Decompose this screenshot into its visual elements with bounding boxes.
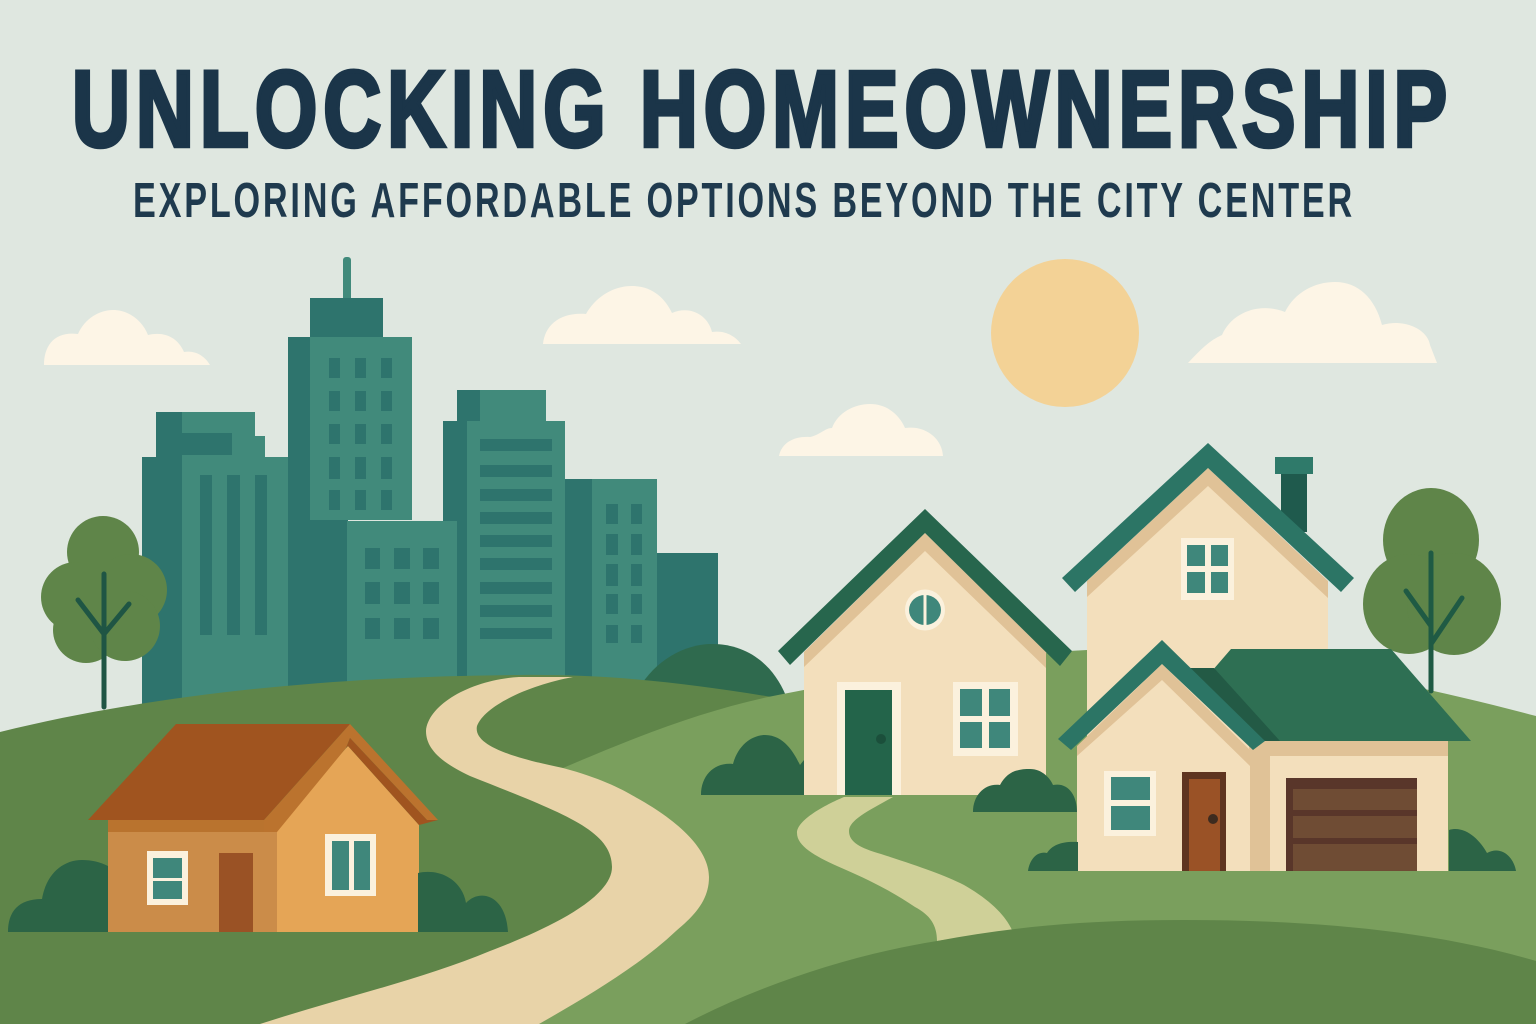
far right dark block — [657, 553, 718, 683]
window — [1104, 771, 1156, 836]
city skyline — [142, 257, 718, 710]
door — [219, 853, 253, 932]
window — [953, 682, 1018, 756]
roof — [778, 509, 1072, 666]
window — [1181, 538, 1234, 600]
building: left tower — [142, 412, 290, 710]
hill: right light green — [400, 650, 1536, 1024]
bush behind the hill — [638, 644, 786, 710]
door — [1182, 772, 1226, 871]
house: middle with gable — [778, 509, 1072, 795]
walls — [108, 820, 277, 932]
house: two-storey rear — [1062, 443, 1354, 760]
road — [260, 677, 709, 1024]
walls — [804, 533, 1046, 795]
garage door — [1286, 778, 1417, 871]
building: central tower — [288, 257, 412, 697]
small garden path — [797, 797, 1012, 941]
garage roof — [1190, 649, 1471, 741]
round window — [905, 590, 945, 630]
tree: right — [1363, 488, 1501, 691]
roof — [88, 724, 350, 820]
hill: back left — [0, 675, 790, 1024]
walls — [1087, 468, 1328, 760]
icon: sun — [991, 259, 1139, 407]
garage wall — [1262, 741, 1448, 871]
window: left — [147, 851, 188, 905]
roof — [1062, 443, 1354, 592]
building: striped tower — [443, 390, 565, 700]
front roof — [1058, 640, 1265, 750]
front gable wall — [1077, 664, 1250, 871]
door — [837, 682, 901, 795]
building: low centre block — [347, 521, 457, 691]
bushes — [8, 735, 1516, 932]
hill: foreground — [685, 920, 1536, 1024]
window: right — [325, 834, 376, 896]
house: small orange starter home — [88, 724, 438, 932]
house: front with garage — [1058, 640, 1471, 871]
building: far right — [565, 479, 657, 689]
tree: left — [41, 516, 167, 707]
chimney — [1275, 457, 1313, 532]
clouds — [44, 282, 1437, 456]
